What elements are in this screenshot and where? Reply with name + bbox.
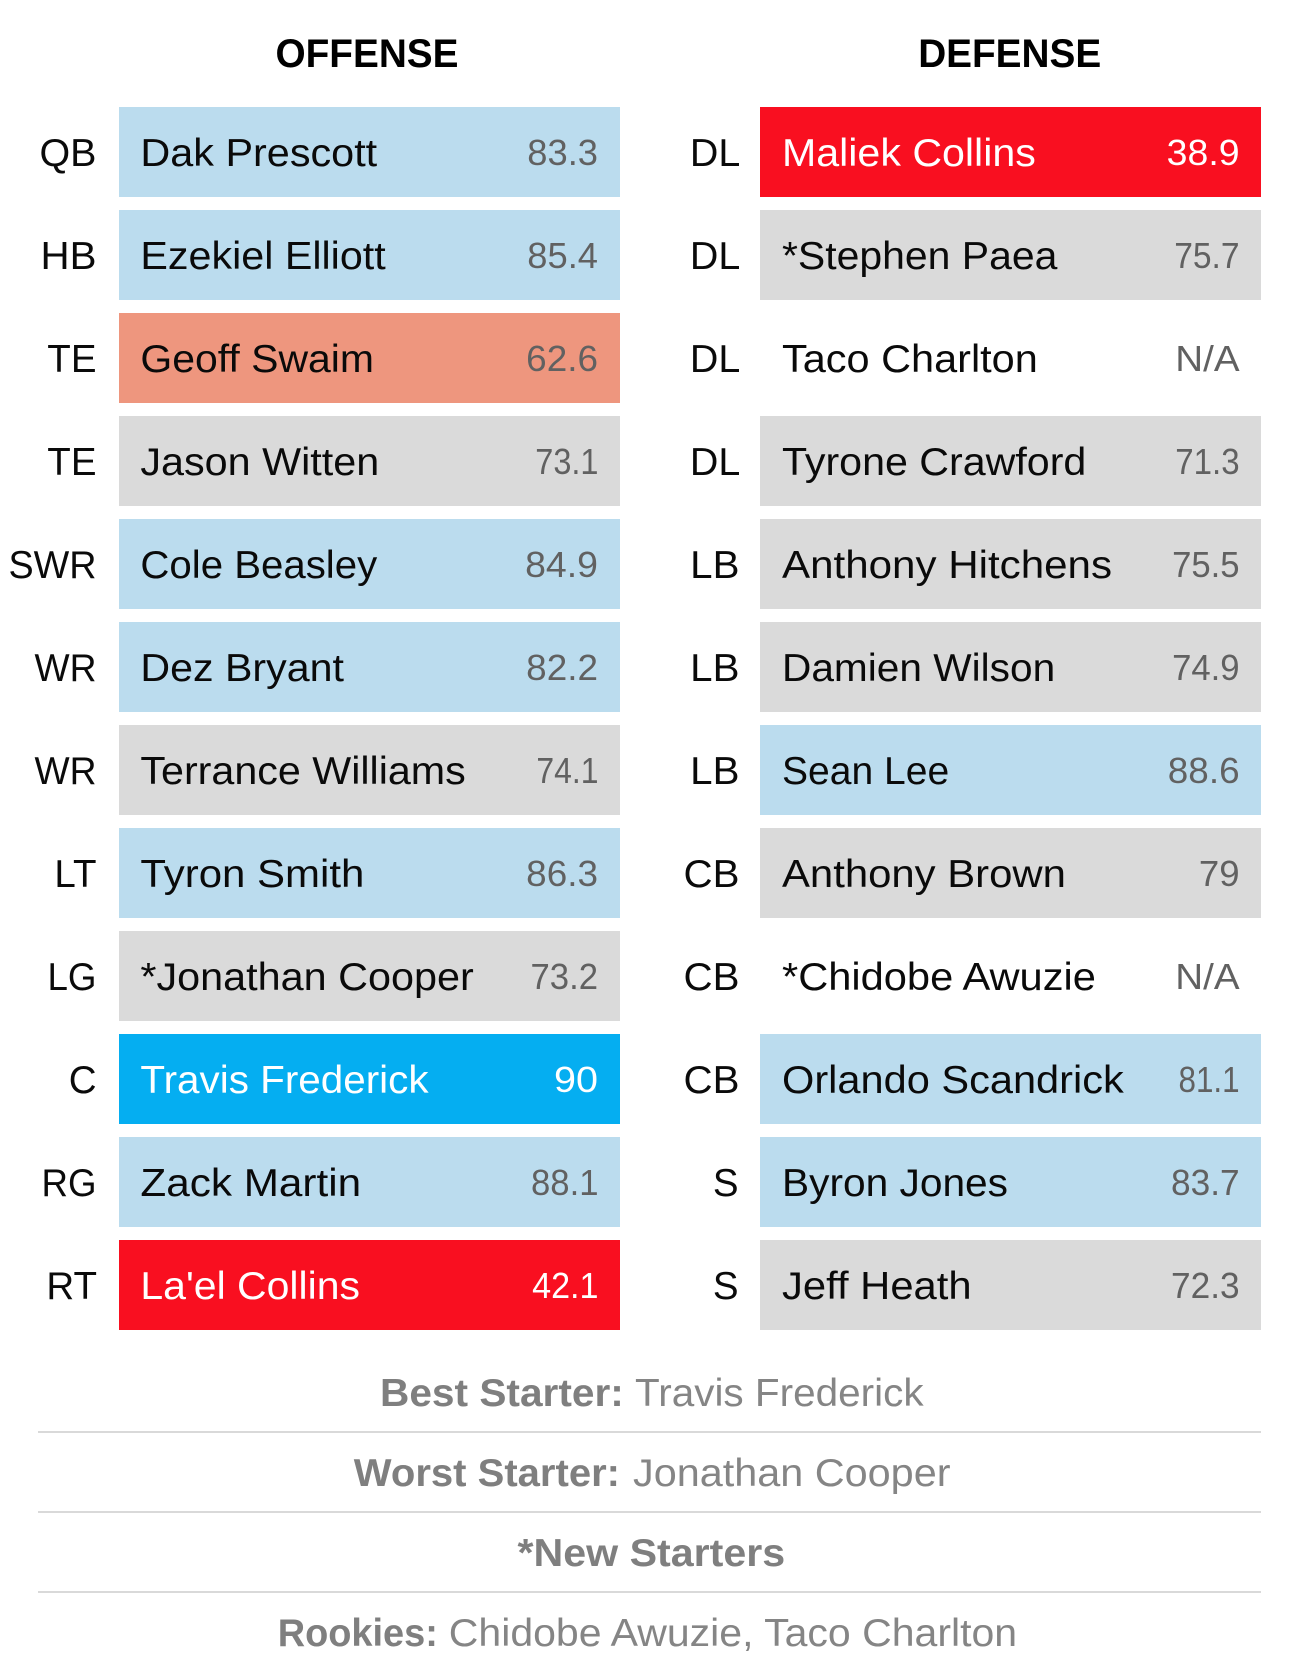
row: DL Taco Charlton N/A: N/A <box>1175 338 1240 379</box>
note: rookies: Rookies: <box>278 1612 438 1655</box>
note: worst starter: Worst Starter: <box>354 1452 620 1495</box>
row: LG Jonathan Cooper 73.2: LG <box>48 956 96 999</box>
row: SWR Cole Beasley 84.9 <box>8 519 620 609</box>
row: WR Dez Bryant 82.2: 82.2 <box>526 647 598 688</box>
row: HB Ezekiel Elliott 85.4: Ezekiel Elliott <box>140 235 386 278</box>
row: RG Zack Martin 88.1: 88.1 <box>531 1162 598 1203</box>
row: QB Dak Prescott 83.3 <box>40 107 620 197</box>
row: LT Tyron Smith 86.3 <box>54 828 620 918</box>
row: S Byron Jones 83.7: 83.7 <box>1171 1162 1240 1203</box>
row: DL Tyrone Crawford 71.3: Tyrone Crawford <box>782 441 1086 484</box>
note: new starters: *New Starters <box>518 1532 785 1575</box>
row: SWR Cole Beasley 84.9: 84.9 <box>525 544 598 585</box>
row: CB Anthony Brown 79: CB <box>684 853 740 896</box>
row: WR Terrance Williams 74.1: Terrance Williams <box>140 750 466 793</box>
row: QB Dak Prescott 83.3: 83.3 <box>527 132 598 173</box>
row: LB Anthony Hitchens 75.5: LB <box>690 544 740 587</box>
row: LB Anthony Hitchens 75.5 <box>690 519 1261 609</box>
row: TE Jason Witten 73.1: Jason Witten <box>140 441 379 484</box>
row: LT Tyron Smith 86.3: Tyron Smith <box>140 853 364 896</box>
note: best starter: Travis Frederick <box>635 1372 924 1415</box>
row: TE Jason Witten 73.1: 73.1 <box>535 441 598 482</box>
note: best starter: Best Starter: <box>380 1372 624 1415</box>
row: LB Sean Lee 88.6: LB <box>690 750 740 793</box>
row: DL Stephen Paea 75.7: DL <box>690 235 740 278</box>
row: LB Sean Lee 88.6: 88.6 <box>1168 750 1240 791</box>
row: DL Stephen Paea 75.7: *Stephen Paea <box>782 235 1058 278</box>
row: S Jeff Heath 72.3 <box>713 1240 1261 1330</box>
row: TE Jason Witten 73.1: TE <box>47 441 96 484</box>
row: RT La'el Collins 42.1: La'el Collins <box>140 1265 360 1308</box>
row: RT La'el Collins 42.1: 42.1 <box>532 1265 598 1306</box>
row: RG Zack Martin 88.1: Zack Martin <box>140 1162 361 1205</box>
row: CB Orlando Scandrick 81.1 <box>684 1034 1261 1124</box>
note: rookies: Chidobe Awuzie, Taco Charlton <box>449 1612 1017 1655</box>
row: CB Chidobe Awuzie N/A: CB <box>684 956 740 999</box>
row: LB Anthony Hitchens 75.5: Anthony Hitchens <box>782 544 1112 587</box>
row: S Byron Jones 83.7 <box>713 1137 1261 1227</box>
row: RT La'el Collins 42.1 <box>46 1240 620 1330</box>
row: WR Dez Bryant 82.2 <box>34 622 620 712</box>
row: RG Zack Martin 88.1: RG <box>42 1162 96 1205</box>
row: LB Sean Lee 88.6: Sean Lee <box>782 750 949 793</box>
row: HB Ezekiel Elliott 85.4 <box>40 210 620 300</box>
row: S Jeff Heath 72.3: S <box>713 1265 738 1308</box>
row: TE Jason Witten 73.1 <box>47 416 620 506</box>
row: LB Anthony Hitchens 75.5: 75.5 <box>1172 544 1240 585</box>
row: S Byron Jones 83.7: S <box>713 1162 738 1205</box>
row: QB Dak Prescott 83.3: Dak Prescott <box>140 132 378 175</box>
heading: defense: DEFENSE <box>918 32 1101 76</box>
row: DL Maliek Collins 38.9: 38.9 <box>1167 132 1240 173</box>
row: RT La'el Collins 42.1: RT <box>46 1265 97 1308</box>
row: LG Jonathan Cooper 73.2: 73.2 <box>530 956 598 997</box>
row: CB Chidobe Awuzie N/A: N/A <box>1175 956 1240 997</box>
row: DL Maliek Collins 38.9 <box>690 107 1261 197</box>
row: WR Terrance Williams 74.1: WR <box>34 750 96 793</box>
row: DL Taco Charlton N/A: DL <box>690 338 740 381</box>
row: S Byron Jones 83.7: Byron Jones <box>782 1162 1008 1205</box>
row: DL Tyrone Crawford 71.3: DL <box>690 441 740 484</box>
row: LB Damien Wilson 74.9: 74.9 <box>1172 647 1240 688</box>
row: C Travis Frederick 90: 90 <box>554 1059 598 1100</box>
row: TE Geoff Swaim 62.6 <box>47 313 620 403</box>
row: LB Damien Wilson 74.9 <box>690 622 1261 712</box>
row: CB Orlando Scandrick 81.1: CB <box>684 1059 740 1102</box>
panel: offense <box>8 32 620 1330</box>
row: DL Taco Charlton N/A: Taco Charlton <box>782 338 1038 381</box>
row: S Jeff Heath 72.3: Jeff Heath <box>782 1265 972 1308</box>
row: LT Tyron Smith 86.3: LT <box>54 853 96 896</box>
row: DL Maliek Collins 38.9: Maliek Collins <box>782 132 1036 175</box>
row: CB Orlando Scandrick 81.1: Orlando Scandrick <box>782 1059 1125 1102</box>
row: SWR Cole Beasley 84.9: Cole Beasley <box>140 544 378 587</box>
row: LT Tyron Smith 86.3: 86.3 <box>526 853 598 894</box>
panel: defense <box>684 32 1261 1330</box>
note: worst starter <box>354 1452 951 1495</box>
row: LB Damien Wilson 74.9: LB <box>690 647 740 690</box>
row: SWR Cole Beasley 84.9: SWR <box>8 544 96 587</box>
row: CB Orlando Scandrick 81.1: 81.1 <box>1178 1059 1240 1100</box>
row: DL Maliek Collins 38.9: DL <box>690 132 740 175</box>
row: RG Zack Martin 88.1 <box>42 1137 620 1227</box>
note: best starter <box>380 1372 924 1415</box>
row: CB Chidobe Awuzie N/A: *Chidobe Awuzie <box>782 956 1096 999</box>
row: CB Anthony Brown 79: Anthony Brown <box>782 853 1066 896</box>
row: LB Sean Lee 88.6 <box>690 725 1261 815</box>
row: DL Stephen Paea 75.7: 75.7 <box>1174 235 1240 276</box>
row: DL Taco Charlton N/A <box>690 338 1240 381</box>
row: CB Anthony Brown 79: 79 <box>1199 853 1240 894</box>
row: LG Jonathan Cooper 73.2: *Jonathan Cooper <box>140 956 474 999</box>
row: WR Dez Bryant 82.2: WR <box>34 647 96 690</box>
row: DL Tyrone Crawford 71.3 <box>690 416 1261 506</box>
row: C Travis Frederick 90: C <box>69 1059 96 1102</box>
row: HB Ezekiel Elliott 85.4: 85.4 <box>527 235 598 276</box>
row: DL Stephen Paea 75.7 <box>690 210 1261 300</box>
row: WR Dez Bryant 82.2: Dez Bryant <box>140 647 344 690</box>
row: WR Terrance Williams 74.1 <box>34 725 620 815</box>
row: DL Tyrone Crawford 71.3: 71.3 <box>1175 441 1240 482</box>
row: C Travis Frederick 90 <box>69 1034 620 1124</box>
heading: offense: OFFENSE <box>276 32 458 76</box>
row: WR Terrance Williams 74.1: 74.1 <box>536 750 598 791</box>
row: TE Geoff Swaim 62.6: Geoff Swaim <box>140 338 374 381</box>
note: worst starter: Jonathan Cooper <box>633 1452 951 1495</box>
row: LB Damien Wilson 74.9: Damien Wilson <box>782 647 1055 690</box>
row: C Travis Frederick 90: Travis Frederick <box>140 1059 429 1102</box>
panel: summary notes <box>38 1372 1261 1655</box>
row: CB Chidobe Awuzie N/A <box>684 956 1240 999</box>
row: QB Dak Prescott 83.3: QB <box>40 132 96 175</box>
row: LG Jonathan Cooper 73.2 <box>48 931 620 1021</box>
row: S Jeff Heath 72.3: 72.3 <box>1171 1265 1240 1306</box>
row: HB Ezekiel Elliott 85.4: HB <box>40 235 96 278</box>
row: CB Anthony Brown 79 <box>684 828 1261 918</box>
row: TE Geoff Swaim 62.6: 62.6 <box>526 338 598 379</box>
row: TE Geoff Swaim 62.6: TE <box>47 338 96 381</box>
